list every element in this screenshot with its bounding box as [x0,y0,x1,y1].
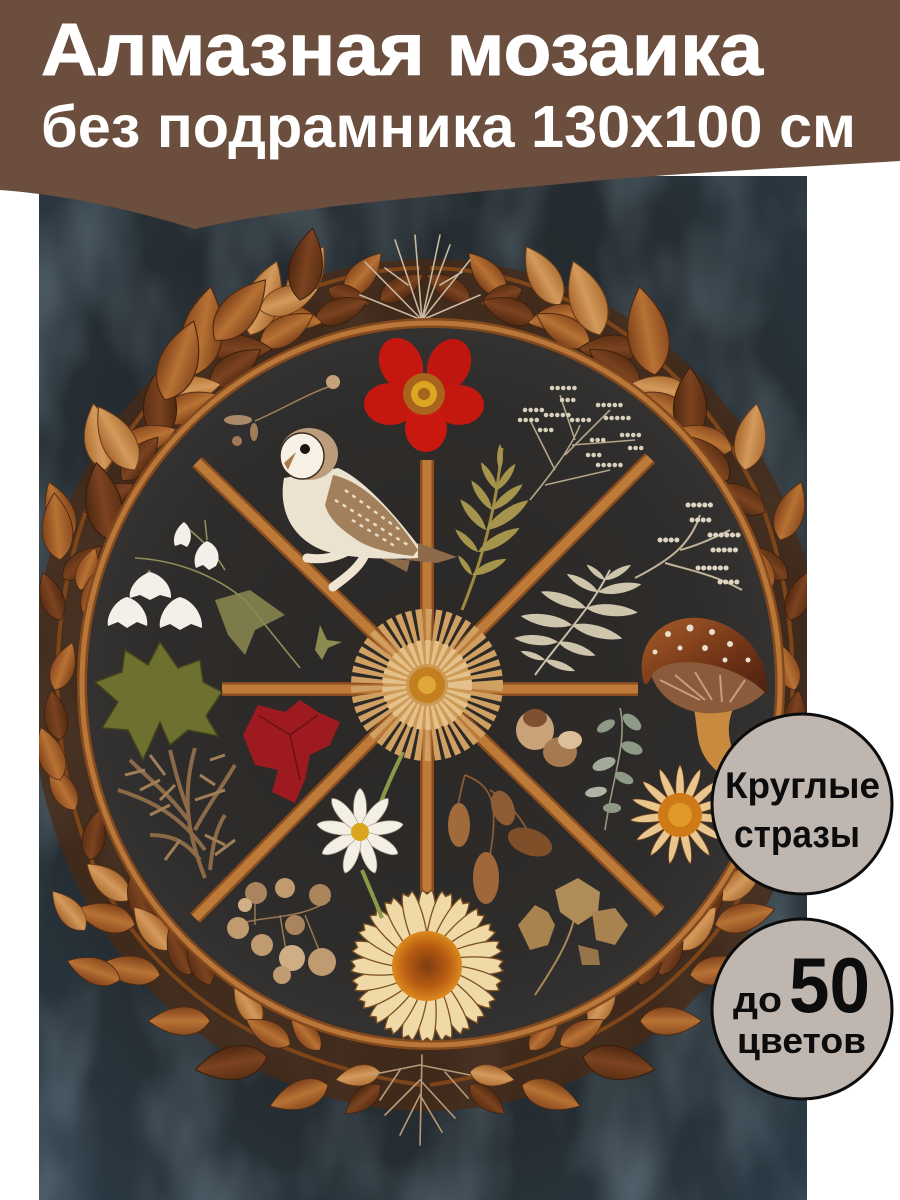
central disc inside ring [84,325,778,1043]
mushroom cap [642,618,767,695]
mushroom [642,618,767,772]
snowdrops [108,520,342,668]
olive fern sprig [453,444,532,610]
green maple leaf [95,642,222,760]
tan herb leaf [518,878,628,995]
panel: mosaic canvas artwork [29,176,818,1200]
bottom root tuft [370,1055,470,1145]
wooden spokes [195,458,660,918]
title line 2: без подрамника 130х100 см [41,94,856,160]
badge: round rhinestones: Круглые [725,765,880,806]
white daisy with stem [316,752,404,918]
red flower [364,331,484,452]
seed pods [448,775,556,904]
sunflower [351,890,503,1042]
badge: up to 50 colours: до [733,979,782,1020]
red leaves [243,700,340,803]
canvas background [39,176,807,1200]
barn owl [280,428,457,587]
owl tail [380,543,457,572]
mushroom gills [650,661,767,713]
badge: round rhinestones: стразы [734,814,860,856]
badge: round rhinestones [712,714,892,894]
mushroom stem [694,710,732,771]
pale dried sprig right [635,505,742,590]
small twig upper left [224,375,340,446]
owl head [280,428,338,480]
pale fern sprig [514,562,642,675]
owl legs [307,548,367,587]
header banner [0,0,900,229]
gypsophila sprig [520,388,644,500]
brown feathery plant [118,748,235,878]
orange-centre daisy [630,764,718,864]
badge: up to 50 colours [712,919,892,1099]
owl wing [325,475,418,556]
small pale mushrooms [516,709,582,767]
central straw flower [369,627,485,743]
owl body [283,468,418,559]
wooden outer ring [82,323,780,1045]
top dried-grass tuft [360,235,480,320]
banner shape [0,0,900,229]
title line 1: Алмазная мозаика [41,8,764,91]
badge: up to 50 colours: 50 [789,941,870,1029]
dried round leaves [227,878,336,984]
badge: up to 50 colours: цветов [737,1020,866,1061]
wreath of autumn leaves [29,225,818,1122]
eucalyptus sprig [584,708,644,830]
